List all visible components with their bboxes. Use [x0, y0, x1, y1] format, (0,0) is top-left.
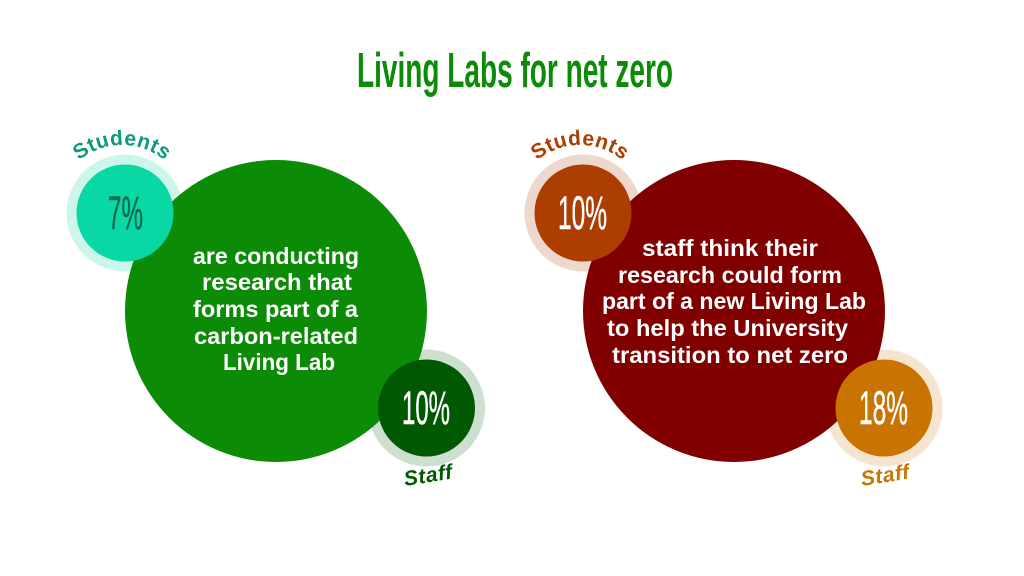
green description text: carbon-related — [194, 323, 358, 349]
green description text: research that — [202, 269, 352, 295]
panel: living lab research now (green) — [66, 130, 485, 491]
student stat badge — [534, 164, 632, 262]
maroon description text: staff think their — [642, 235, 818, 261]
staff label: Staff — [402, 460, 456, 491]
student stat ring — [66, 154, 184, 272]
staff stat badge: 18% — [859, 381, 908, 434]
maroon description text: part of a new Living Lab — [602, 288, 866, 314]
main maroon circle — [583, 160, 885, 462]
maroon description text: transition to net zero — [612, 342, 848, 368]
title: Living Labs for net zero — [357, 44, 673, 98]
student stat badge — [76, 164, 174, 262]
panel: potential new living lab (maroon) — [524, 130, 942, 491]
staff label: Staff — [859, 460, 913, 491]
student stat badge: 10% — [558, 186, 607, 239]
student stat badge: 7% — [108, 186, 143, 239]
green description text: forms part of a — [193, 296, 358, 322]
staff stat ring — [368, 350, 485, 466]
staff stat badge — [378, 360, 475, 456]
staff stat badge — [836, 360, 932, 456]
staff stat ring — [826, 350, 942, 466]
green description text — [193, 243, 359, 375]
green description text: Living Lab — [223, 349, 335, 375]
maroon description text — [602, 235, 866, 368]
staff stat badge: 10% — [402, 381, 450, 434]
maroon description text: research could form — [618, 262, 842, 288]
maroon description text: to help the University — [607, 315, 848, 341]
green description text: are conducting — [193, 243, 359, 269]
main green circle — [125, 160, 427, 462]
student label: Students — [531, 130, 627, 158]
student label: Students — [73, 130, 169, 158]
student stat ring — [524, 154, 642, 272]
